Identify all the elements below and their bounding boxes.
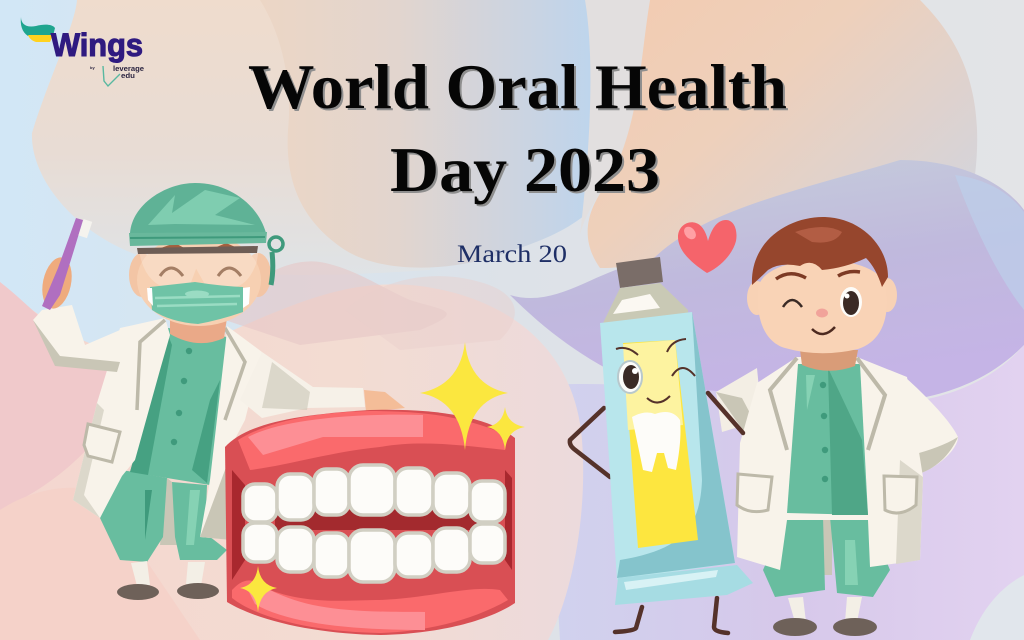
logo byline: by <box>90 65 95 70</box>
title: Day 2023 <box>392 136 662 207</box>
dentist hand on gums <box>364 390 405 412</box>
heart <box>678 220 737 273</box>
logo: Wings by leverage edu <box>21 17 144 86</box>
logo byline: leverage <box>113 64 144 73</box>
boy head <box>747 217 897 371</box>
logo wordmark: Wings <box>51 27 143 63</box>
giant teeth model <box>225 342 525 635</box>
toothbrush in hand <box>38 218 92 311</box>
title: Day 2023 <box>390 134 660 205</box>
tube face <box>616 339 695 403</box>
tube shoulder <box>603 283 688 323</box>
dentist coat <box>33 305 365 540</box>
logo byline <box>90 64 144 86</box>
dentist surgical mask <box>147 282 250 324</box>
dentist socks and shoes <box>117 561 219 600</box>
toothpaste tube character <box>570 257 753 633</box>
boy coat <box>716 357 958 570</box>
boy hair <box>752 217 888 287</box>
title: World Oral Health <box>250 53 789 124</box>
boy socks and shoes <box>773 597 877 636</box>
boy trousers <box>763 515 890 597</box>
dentist scrubs <box>130 328 227 485</box>
boy scrubs <box>770 358 885 515</box>
sparkles <box>240 342 525 612</box>
dentist trousers <box>100 470 227 562</box>
logo swoosh <box>21 17 55 42</box>
tube right arm <box>708 393 743 433</box>
tube arms and legs <box>570 408 728 633</box>
gums <box>225 410 515 635</box>
date: March 20 <box>457 241 567 268</box>
tube cap <box>616 257 663 288</box>
logo byline: edu <box>121 71 135 80</box>
tube body <box>600 312 753 605</box>
lower teeth <box>243 523 505 582</box>
upper teeth <box>243 465 505 522</box>
dentist character <box>33 183 405 600</box>
dentist surgical cap <box>129 183 283 285</box>
dentist head <box>129 234 271 343</box>
title <box>248 51 789 207</box>
boy dentist character <box>708 217 958 636</box>
tube tooth <box>632 412 680 472</box>
title: World Oral Health <box>248 51 787 122</box>
